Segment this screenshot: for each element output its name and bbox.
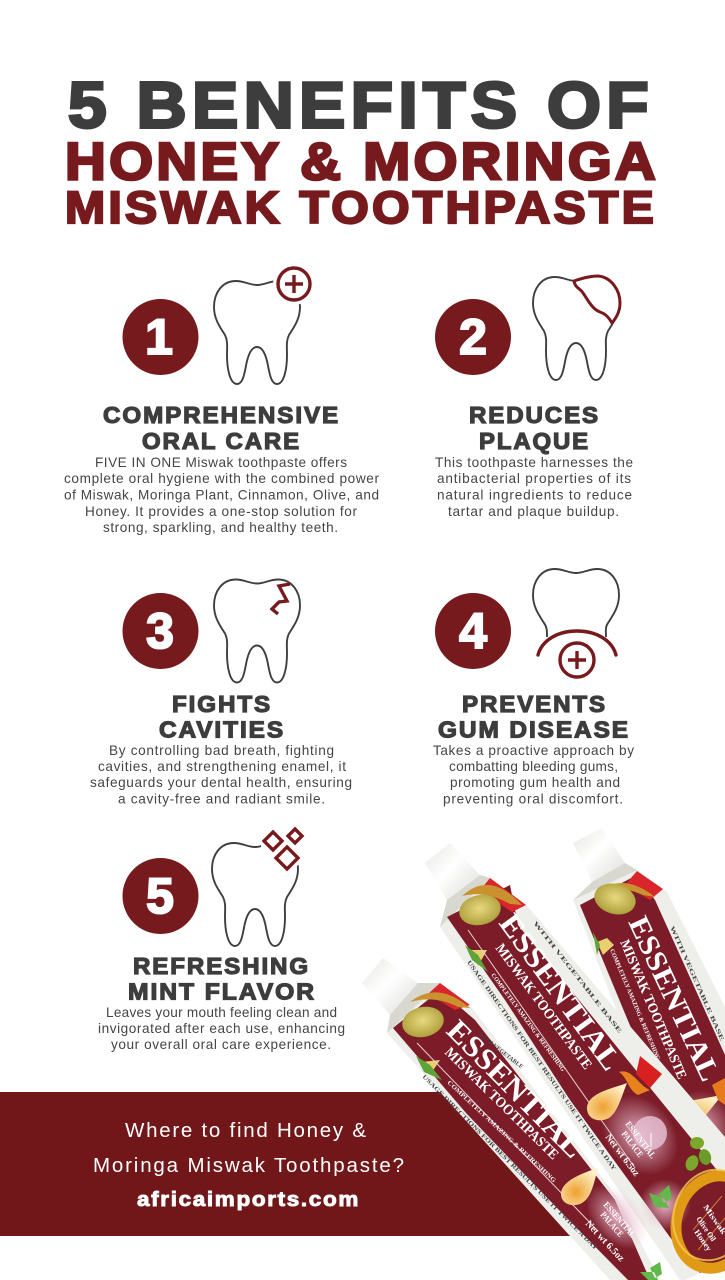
heading: fights cavities (159, 691, 285, 742)
banner: where to find (0, 1092, 570, 1236)
text: benefit 4 description: Takes a proactive approach by (433, 743, 634, 758)
banner: where to find: Where to find Honey & (125, 1119, 366, 1142)
heading: comprehensive oral care (103, 402, 340, 454)
icon: tooth with plaque (533, 276, 620, 380)
text: benefit 1 description: FIVE IN ONE Miswak toothpaste offers (95, 455, 347, 470)
number badge 2 (435, 299, 511, 375)
heading: refreshing mint flavor: MINT FLAVOR (128, 978, 316, 1004)
heading: prevents gum disease (438, 691, 630, 742)
number badge 4 (435, 593, 511, 669)
banner: where to find: Moringa Miswak Toothpaste? (93, 1154, 404, 1177)
text: benefit 4 description: promoting gum health and (450, 775, 620, 790)
text: benefit 3 description: safeguards your dental health, ensuring (90, 775, 352, 790)
honey ring: Honey (692, 1228, 713, 1253)
honey ring: Olive Oil (694, 1215, 718, 1244)
title: MISWAK TOOTHPASTE (65, 182, 657, 233)
number badge 1: 1 (145, 309, 173, 365)
toothpaste tube: middle: USAGE DIRECTIONS FOR BEST RESULTS USE IT TWICE A DAY (465, 960, 617, 1173)
heading: fights cavities: CAVITIES (159, 716, 285, 742)
toothpaste tube: front left: MISWAK TOOTHPASTE (441, 1044, 562, 1163)
number badge 3: 3 (146, 603, 174, 659)
heading: refreshing mint flavor: REFRESHING (133, 953, 310, 979)
toothpaste tube: front left: Net wt 6.5oz (583, 1219, 627, 1264)
toothpaste tube: front left: WITH VEGETABLE (477, 1032, 524, 1070)
panel: benefit 2 (435, 276, 633, 519)
icon: tooth with sparkles (212, 821, 309, 946)
heading: reduces plaque: REDUCES (469, 402, 600, 428)
text: benefit 1 description: Honey. It provides a one-stop solution for (85, 504, 357, 519)
heading: comprehensive oral care: COMPREHENSIVE (103, 402, 340, 428)
number badge 2: 2 (459, 309, 487, 365)
heading: prevents gum disease: GUM DISEASE (438, 716, 630, 742)
toothpaste tube: middle: MISWAK TOOTHPASTE (492, 941, 595, 1073)
text: benefit 5 description: invigorated after each use, enhancing (98, 1021, 345, 1036)
text: benefit 1 description: strong, sparkling, and healthy teeth. (103, 520, 338, 535)
toothpaste tube: front left: ESSENTIAL (601, 1200, 638, 1240)
toothpaste tube: middle: COMPLETELY AMAZING & REFRESHING (489, 973, 566, 1073)
toothpaste tube: front left: PALACE (598, 1210, 626, 1239)
icon: tooth crown with gum and plus (533, 569, 619, 677)
text: benefit 3 description: a cavity-free and radiant smile. (118, 792, 325, 806)
heading: reduces plaque (469, 402, 600, 454)
number badge 4: 4 (459, 603, 487, 659)
banner: where to find: africaimports.com (137, 1188, 360, 1211)
toothpaste tube: middle: ESSENTIAL (623, 1119, 658, 1160)
text: benefit 3 description: cavities, and strengthening enamel, it (98, 759, 346, 774)
text: benefit 2 description: tartar and plaque buildup. (448, 504, 619, 519)
text: benefit 1 description (64, 455, 379, 535)
number badge 3 (122, 593, 198, 669)
heading: refreshing mint flavor (128, 953, 316, 1004)
text: benefit 1 description: complete oral hygiene with the combined power (64, 471, 379, 486)
text: benefit 5 description: your overall oral care experience. (111, 1037, 331, 1052)
heading: reduces plaque: PLAQUE (479, 428, 590, 454)
number badge 5: 5 (146, 868, 174, 924)
heading: prevents gum disease: PREVENTS (462, 691, 607, 717)
toothpaste tube: middle: WITH VEGETABLE BASE (531, 921, 622, 1035)
panel: benefit 1 (64, 263, 379, 535)
toothpaste tube: back right: WITH VEGETABLE BASE (668, 925, 724, 1042)
toothpaste tube: front left: USAGE DIRECTIONS FOR BEST RESULTS USE IT TWICE A DAY (421, 1074, 599, 1252)
text: benefit 3 description (90, 743, 352, 806)
toothpaste tube: back right (573, 828, 725, 1190)
number badge 5 (122, 858, 198, 934)
title: HONEY & MORINGA (65, 132, 659, 192)
panel: benefit 3 (90, 580, 352, 806)
text: benefit 2 description (435, 455, 633, 519)
toothpaste tube: front left: COMPLETELY AMAZING & REFRESHING (446, 1080, 557, 1184)
honey ring: Miswak (701, 1203, 725, 1237)
text: benefit 2 description: This toothpaste harnesses the (435, 455, 633, 470)
toothpaste tube: front left (362, 958, 662, 1280)
honey ring (662, 1160, 725, 1278)
title (65, 68, 659, 233)
text: benefit 3 description: By controlling bad breath, fighting (109, 743, 334, 758)
panel: benefit 5 (98, 821, 345, 1052)
toothpaste tube: middle: Net wt 6.5oz (603, 1132, 642, 1179)
icon: tooth with plus (214, 263, 315, 384)
toothpaste tube: middle: ESSENTIAL (492, 908, 628, 1077)
text: benefit 1 description: of Miswak, Moringa Plant, Cinnamon, Olive, and (64, 488, 379, 502)
toothpaste tube: middle: PALACE (619, 1129, 645, 1159)
number badge 1 (122, 299, 198, 375)
toothpaste tube: back right: COMPLETELY AMAZING & REFRESHING (608, 948, 661, 1062)
toothpaste tube: back right: ESSENTIAL (622, 911, 725, 1086)
heading: fights cavities: FIGHTS (172, 691, 272, 717)
text: benefit 5 description (98, 1005, 345, 1052)
icon: tooth with crack (214, 580, 300, 682)
toothpaste tube: middle (425, 843, 725, 1280)
toothpaste tube: front left: ESSENTIAL (440, 1014, 590, 1165)
text: benefit 2 description: antibacterial properties of its (437, 471, 631, 486)
heading: comprehensive oral care: ORAL CARE (142, 428, 301, 454)
text: benefit 2 description: natural ingredients to reduce (437, 488, 632, 502)
toothpaste tube: back right: MISWAK TOOTHPASTE (616, 938, 689, 1082)
panel: benefit 4 (433, 569, 634, 806)
text: benefit 4 description: preventing oral discomfort. (443, 792, 623, 806)
text: benefit 4 description: combatting bleeding gums, (449, 759, 618, 774)
title: 5 BENEFITS OF (68, 68, 654, 142)
text: benefit 4 description (433, 743, 634, 806)
text: benefit 5 description: Leaves your mouth feeling clean and (106, 1005, 337, 1020)
